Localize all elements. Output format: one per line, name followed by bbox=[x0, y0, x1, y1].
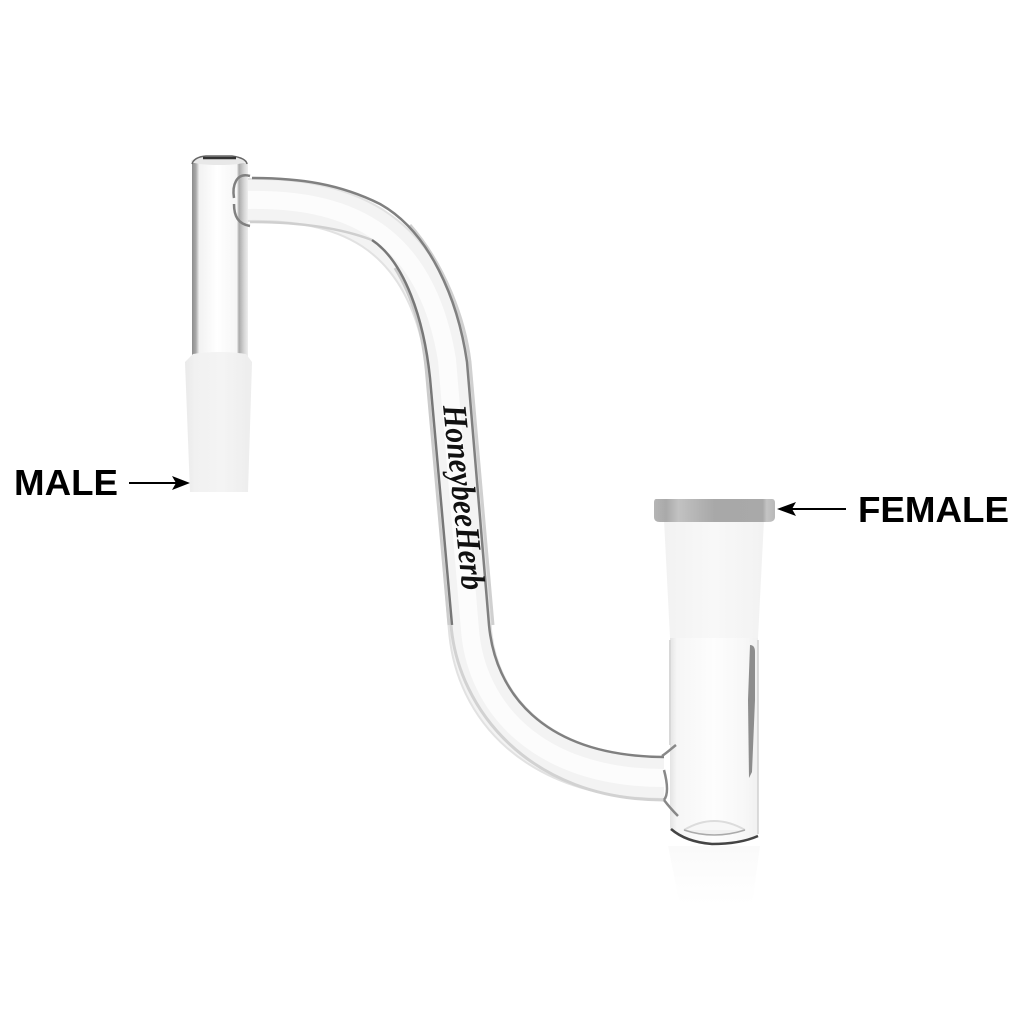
curved glass tube bbox=[245, 178, 664, 800]
male glass stem bbox=[192, 163, 248, 359]
label: FEMALE: FEMALE bbox=[858, 489, 1009, 530]
left edge: upper inner straight bbox=[372, 240, 452, 625]
female joint: flange, frosted socket and glass chamber bbox=[654, 499, 775, 844]
lower outer edge bbox=[451, 625, 664, 800]
frosted socket bbox=[664, 520, 764, 638]
arrow: to male joint bbox=[129, 476, 190, 490]
brand text: HoneybeeHerb: HoneybeeHerb bbox=[435, 402, 491, 592]
glass chamber bbox=[670, 636, 758, 844]
left edge grey fringe bbox=[395, 268, 449, 625]
weld to tube bbox=[662, 745, 678, 816]
right edge grey fringe bbox=[410, 225, 493, 625]
arrow: to female joint bbox=[777, 502, 846, 516]
male joint: glass tube and frosted taper bbox=[185, 156, 252, 492]
frosted taper bbox=[185, 352, 252, 492]
rim bbox=[191, 157, 247, 165]
label: MALE: MALE bbox=[14, 462, 118, 503]
continuous right edge: top outer to lower inner bbox=[252, 178, 664, 757]
weld to tube bbox=[234, 175, 250, 226]
dark inner refraction bbox=[748, 645, 755, 778]
floor reflection bbox=[668, 846, 760, 905]
upper inner soft edge bbox=[250, 222, 372, 240]
grey flange bbox=[654, 499, 775, 522]
chamber base bbox=[671, 829, 758, 844]
